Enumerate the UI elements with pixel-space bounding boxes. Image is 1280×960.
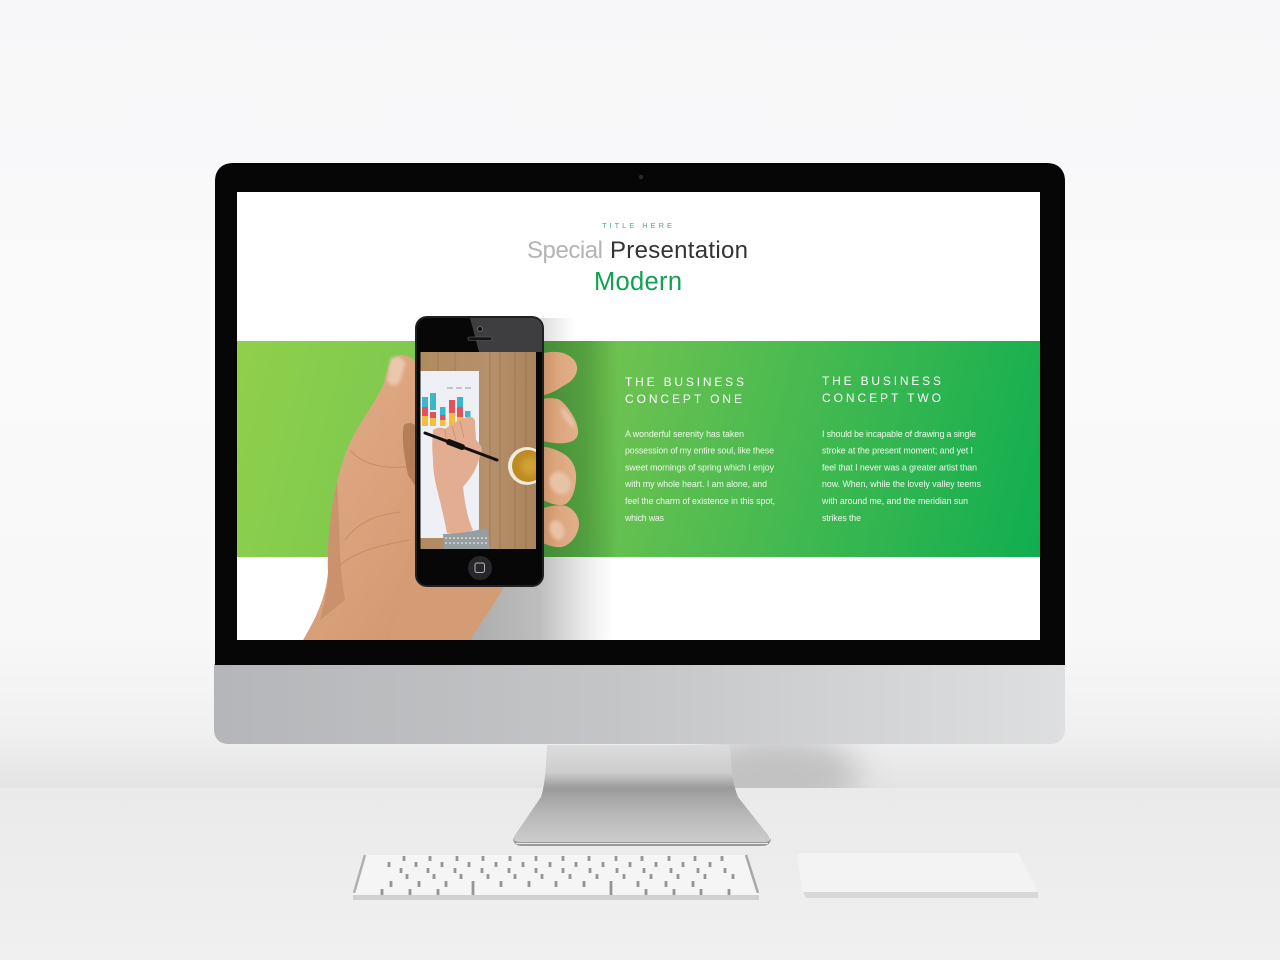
concept one body: which was — [624, 513, 665, 523]
concept two body: feel that I never was a greater artist than — [822, 462, 977, 472]
concept two body: strikes the — [822, 513, 861, 523]
monitor stand — [513, 745, 771, 846]
phone speaker and camera — [468, 326, 492, 340]
green band — [237, 341, 1040, 557]
phone shadow on band — [544, 341, 610, 557]
concept one body: feel the charm of existence in this spot, — [625, 496, 775, 506]
concept two body: now. When, while the lovely valley teems — [822, 479, 982, 489]
coffee cup — [508, 447, 536, 485]
phone screen photo — [420, 352, 546, 549]
keyboard key gaps — [382, 856, 733, 895]
concept one body: A wonderful serenity has taken — [625, 429, 744, 439]
subtitle: Modern — [594, 268, 682, 296]
monitor chin — [214, 664, 1065, 744]
phone shadow on white — [470, 557, 602, 640]
pen — [425, 433, 497, 460]
phone glass reflection — [470, 318, 542, 352]
concept two body: I should be incapable of drawing a single — [822, 429, 976, 439]
phone shadow above band — [540, 318, 566, 341]
concept two column — [821, 374, 982, 523]
stand shadow on wall — [696, 744, 867, 788]
monitor — [214, 163, 1065, 744]
webcam — [639, 175, 643, 179]
concept one body: with my whole heart. I am alone, and — [624, 479, 767, 489]
main title grey word: Special — [527, 237, 603, 264]
writing hand and arm — [432, 417, 482, 534]
concept two body: with around me, and the meridian sun — [821, 496, 968, 506]
concept one body: possession of my entire soul, like these — [625, 446, 774, 456]
concept two heading line one: THE BUSINESS — [822, 374, 941, 388]
concept one heading line one: THE BUSINESS — [625, 375, 744, 389]
concept two heading line two: CONCEPT TWO — [822, 391, 941, 405]
sleeve — [443, 528, 490, 549]
concept one column — [624, 375, 775, 523]
main title dark word: Presentation — [610, 237, 748, 264]
smartphone — [415, 316, 546, 587]
slide screen — [237, 192, 1040, 640]
hand holding phone — [303, 352, 579, 640]
slide title block — [528, 223, 746, 290]
keyboard — [353, 855, 759, 900]
concept two body: stroke at the present moment; and yet I — [822, 446, 973, 456]
small title: TITLE HERE — [602, 221, 672, 230]
phone home button — [468, 556, 492, 580]
trackpad — [797, 853, 1038, 898]
concept one body: sweet mornings of spring which I enjoy — [625, 462, 775, 472]
fingers — [544, 352, 579, 548]
concept one body — [624, 429, 775, 523]
paper — [420, 371, 479, 538]
concept two body — [821, 429, 982, 523]
concept one heading line two: CONCEPT ONE — [625, 392, 742, 406]
bar chart on paper — [422, 388, 471, 426]
monitor bezel — [215, 163, 1065, 665]
background: desk — [0, 788, 1280, 960]
